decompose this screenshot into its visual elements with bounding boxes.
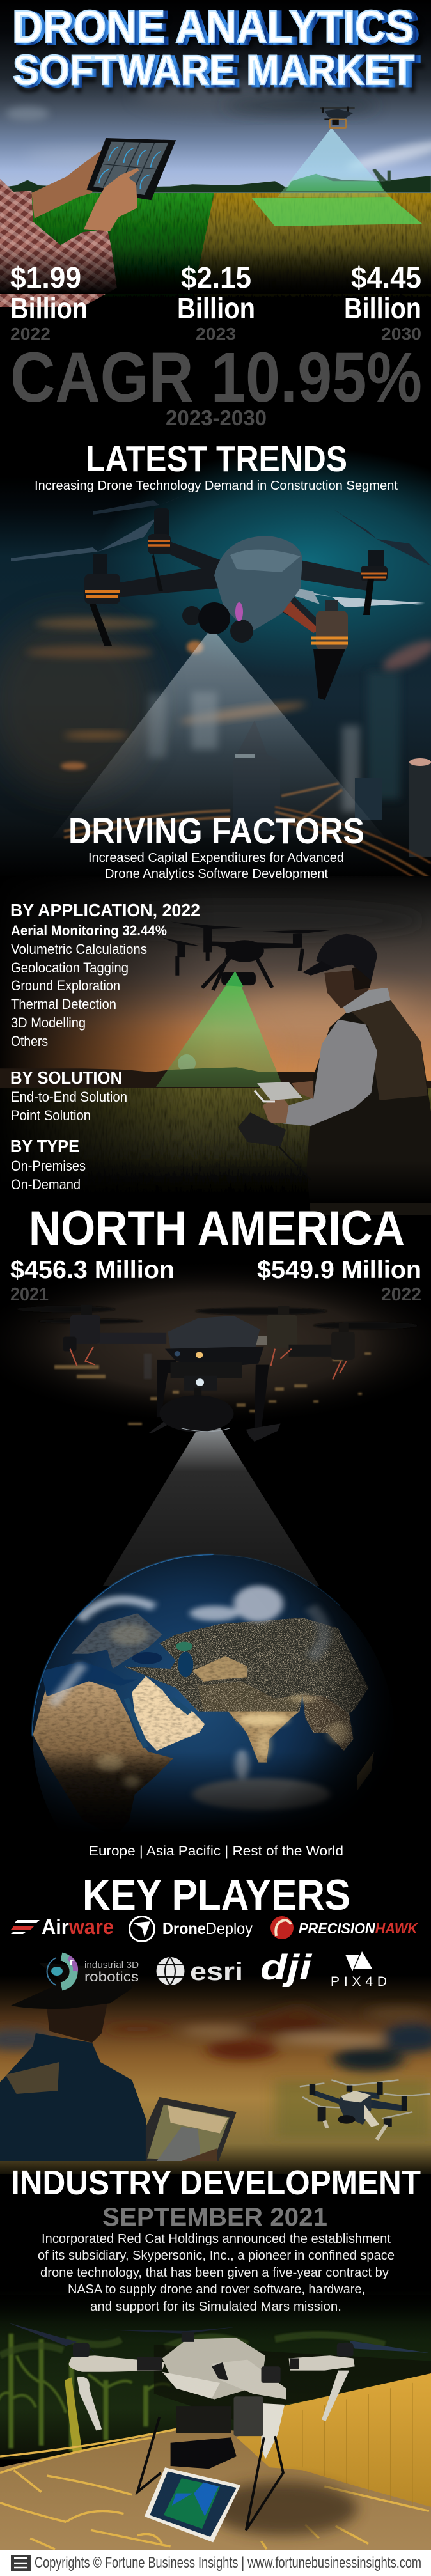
- title: [12, 2, 425, 102]
- text: development date: SEPTEMBER 2021: [102, 2203, 327, 2231]
- stat: north america 2021: [10, 1256, 175, 1305]
- logo: Airware: Airware: [42, 1915, 114, 1939]
- stat: north america 2021: 2021: [10, 1284, 49, 1305]
- text: driving factor description: Drone Analytics Software Development: [105, 867, 328, 881]
- logo: PIX4D: PIX4D: [331, 1974, 387, 1989]
- list: by application: Geolocation Tagging: [11, 960, 129, 976]
- city lights: [54, 1352, 371, 1425]
- straw: [0, 2429, 429, 2549]
- icon: Fortune Business Insights logo: [11, 2555, 31, 2571]
- list: by application: BY APPLICATION, 2022: [10, 900, 200, 920]
- logo: industrial 3D robotics: [47, 1956, 139, 1987]
- logo: industrial 3D robotics: r: [70, 1956, 74, 1967]
- icon: white survey drone: [8, 2323, 431, 2542]
- list: by solution: Point Solution: [11, 1107, 91, 1123]
- logo: PrecisionHawk: PRECISIONHAWK: [299, 1920, 418, 1937]
- market size 2023: 2023: [196, 324, 236, 343]
- logo: esri: [156, 1957, 243, 1986]
- panel: driving factors scene: [0, 876, 431, 1215]
- market size 2030: [344, 261, 421, 343]
- heading: latest trends: LATEST TRENDS: [86, 439, 347, 480]
- logo: Airware: [11, 1915, 114, 1939]
- corn plants: [0, 2334, 385, 2451]
- icon: small drone: [320, 107, 355, 128]
- icon: white drone: [300, 2080, 430, 2140]
- list: by application: Volumetric Calculations: [11, 941, 147, 957]
- text: development description: and support for its Simulated Mars mission.: [90, 2300, 341, 2314]
- logo: DroneDeploy: [129, 1917, 253, 1941]
- text: development description: drone technology, that has been given a five-year contract by: [40, 2266, 389, 2280]
- stat: north america 2022: [257, 1256, 421, 1305]
- list: by solution: [10, 1068, 127, 1123]
- icon: large drone: [11, 487, 431, 700]
- market size 2030: 2030: [381, 324, 421, 343]
- text: trend description: Increasing Drone Technology Demand in Construction Segment: [35, 479, 398, 493]
- stat: north america 2022: $549.9 Million: [257, 1256, 421, 1284]
- heading: driving factors: DRIVING FACTORS: [68, 811, 364, 852]
- logo: esri: esri: [190, 1958, 243, 1986]
- logo: PrecisionHawk: [270, 1916, 418, 1939]
- icon: scanning cone: [103, 1410, 319, 1586]
- icon: scanning cone: [278, 128, 390, 197]
- market size 2022: 2022: [10, 324, 51, 343]
- icon: professional drone: [17, 1305, 418, 1442]
- logo: dji: dji: [260, 1947, 313, 1987]
- panel: north america scene: [0, 1260, 431, 1586]
- list: by application: Others: [11, 1033, 48, 1049]
- logo: PIX4D: [331, 1951, 387, 1989]
- title line 1: DRONE ANALYTICS: [12, 2, 414, 52]
- list: by solution: End-to-End Solution: [11, 1089, 127, 1105]
- icon: scanning cone: [52, 628, 385, 838]
- text: driving factor description: [88, 851, 344, 881]
- market size 2030: $4.45: [351, 261, 421, 294]
- text: other regions: Europe | Asia Pacific | Rest of the World: [89, 1844, 343, 1859]
- list: by application: [10, 900, 200, 1049]
- logo: industrial 3D robotics: industrial 3D: [84, 1960, 139, 1971]
- scanned field area: [251, 197, 422, 226]
- text: development description: of its subsidiary, Skypersonic, Inc., a pioneer in confined space: [38, 2249, 395, 2263]
- market size 2022: $1.99: [10, 261, 81, 294]
- panel: latest trends scene: [0, 448, 431, 889]
- list: by type: [10, 1136, 86, 1192]
- logo: industrial 3D robotics: robotics: [84, 1970, 139, 1985]
- icon: hands holding tablet: [0, 138, 176, 307]
- text: development description: NASA to supply drone and rover software, hardware,: [68, 2283, 365, 2297]
- text: development description: [38, 2232, 395, 2314]
- city towers: [64, 635, 431, 889]
- list: by application: Thermal Detection: [11, 996, 116, 1012]
- panel: header scene with tablet and drone: [0, 0, 431, 307]
- icon: drone pilot with controller: [238, 934, 431, 1215]
- icon: drone: [162, 922, 334, 990]
- icon: green scan cone: [156, 972, 283, 1087]
- icon: farmer with tablet: [0, 1963, 237, 2161]
- text: development description: Incorporated Red Cat Holdings announced the establishment: [42, 2232, 391, 2246]
- market size 2023: [177, 261, 255, 343]
- list: by type: On-Premises: [11, 1158, 86, 1174]
- logo: DroneDeploy: DroneDeploy: [162, 1920, 253, 1938]
- CAGR figure: 2023-2030: [166, 406, 267, 430]
- heading: key players: KEY PLAYERS: [82, 1871, 350, 1919]
- panel: industry development scene: [0, 2174, 431, 2576]
- stat: north america 2022: 2022: [381, 1284, 421, 1305]
- list: by type: BY TYPE: [10, 1136, 79, 1156]
- panel: key players scene: [0, 1963, 431, 2180]
- list: by solution: BY SOLUTION: [10, 1068, 122, 1088]
- market size 2022: Billion: [10, 292, 88, 325]
- market size 2022: [10, 261, 88, 343]
- market size 2023: $2.15: [181, 261, 251, 294]
- text: driving factor description: Increased Capital Expenditures for Advanced: [88, 851, 344, 865]
- heading: north america: NORTH AMERICA: [29, 1201, 405, 1256]
- list: by application: Ground Exploration: [11, 978, 120, 994]
- stat: north america 2021: $456.3 Million: [10, 1256, 175, 1284]
- list: by application: 3D Modelling: [11, 1015, 86, 1031]
- market size 2023: Billion: [177, 292, 255, 325]
- illustration: earth at night: [31, 1553, 376, 1824]
- list: by application: Aerial Monitoring 32.44%: [11, 923, 167, 939]
- list: by type: On-Demand: [11, 1176, 81, 1192]
- footer: [0, 2550, 431, 2576]
